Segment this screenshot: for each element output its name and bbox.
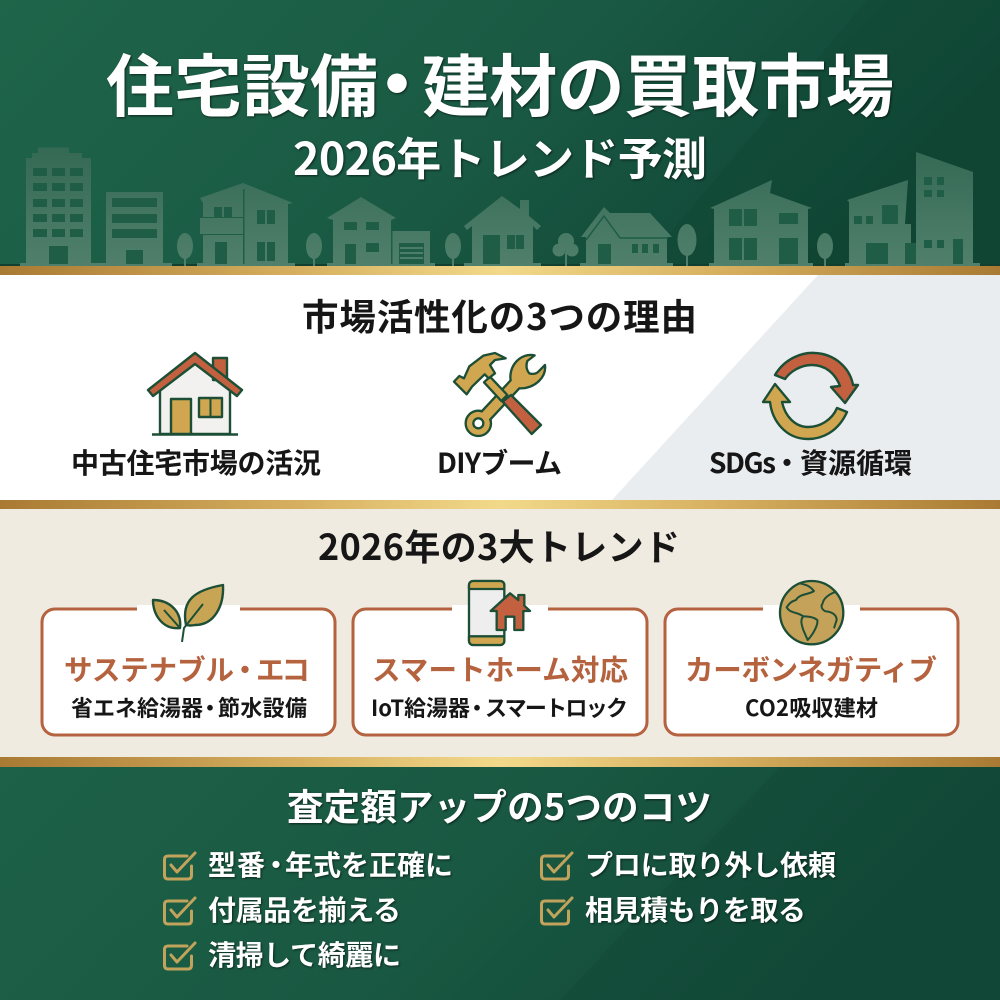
- tip 1: 年式を正確に: [285, 844, 453, 884]
- panel: tips background: [0, 767, 1000, 1000]
- label: used housing market: 中古住宅市場の活況: [71, 442, 321, 482]
- gold divider: [0, 757, 1000, 767]
- title: ・: [359, 24, 435, 134]
- heading: trends: 2026年の3大トレンド: [318, 519, 680, 571]
- card title: サステナブル: [64, 648, 234, 689]
- panel: trends background: [0, 509, 1000, 757]
- label: SDGs and resource circulation: SDGs: [709, 442, 776, 482]
- two storey house: [197, 183, 295, 266]
- card title: [64, 648, 310, 689]
- tip 5: 相見積もりを取る: [585, 889, 806, 929]
- card text: スマートロック: [485, 691, 628, 723]
- icon: leaves: [153, 585, 223, 642]
- label: DIY boom: DIYブーム: [437, 442, 562, 482]
- icon: recycle arrows: [763, 353, 858, 439]
- card text: [71, 691, 307, 723]
- label: SDGs and resource circulation: ・: [773, 442, 801, 482]
- label: SDGs and resource circulation: 資源循環: [800, 442, 912, 482]
- icon: phone with house: [469, 581, 530, 645]
- tip 2: 付属品を揃える: [208, 889, 401, 929]
- title: 住宅設備: [106, 32, 378, 131]
- card text: [371, 691, 628, 723]
- hammer: [454, 353, 541, 434]
- skyline illustration: [0, 147, 1000, 267]
- cottage: [580, 207, 673, 266]
- tip 1: ・: [262, 844, 290, 884]
- gold divider: [0, 500, 1000, 509]
- card text: IoT給湯器: [371, 691, 470, 723]
- townhouse and tower: [845, 152, 980, 266]
- tip 1: [164, 844, 453, 884]
- card: carbon negative: [665, 581, 958, 735]
- card: smart home: [353, 581, 647, 735]
- tip 3: 清掃して綺麗に: [208, 934, 401, 974]
- icon: globe: [780, 581, 843, 644]
- modern house: [709, 180, 813, 266]
- tip 4: プロに取り外し依頼: [585, 844, 836, 884]
- gold divider: [0, 266, 1000, 275]
- office building: [96, 192, 172, 266]
- card text: ・: [199, 691, 221, 723]
- card text: 省エネ給湯器: [71, 691, 203, 723]
- icon: hammer and wrench: [454, 353, 545, 436]
- card text: ・: [466, 691, 488, 723]
- card text: 節水設備: [218, 691, 307, 723]
- card: sustainable: [42, 585, 335, 735]
- card text: CO2吸収建材: [745, 691, 878, 723]
- house with garage: [327, 197, 435, 266]
- tip 1: 型番: [208, 844, 265, 884]
- tree: [445, 233, 461, 266]
- title: 建材の買取市場: [422, 32, 894, 131]
- tall tree: [678, 224, 696, 266]
- tree: [817, 233, 833, 266]
- tree: [306, 233, 322, 266]
- tree: [177, 233, 193, 266]
- card title: スマートホーム対応: [372, 648, 628, 689]
- panel: reasons background: [0, 275, 1000, 500]
- title: [106, 24, 894, 134]
- apartment tower: [20, 147, 101, 266]
- heading: reasons: 市場活性化の3つの理由: [302, 288, 697, 341]
- card title: カーボンネガティブ: [685, 648, 937, 689]
- icon: house: [148, 353, 242, 434]
- gabled house: [464, 196, 541, 266]
- round tree: [552, 233, 578, 266]
- card title: エコ: [256, 648, 310, 689]
- card title: ・: [231, 648, 259, 689]
- heading: tips: 査定額アップの5つのコツ: [287, 778, 712, 831]
- label: SDGs and resource circulation: [709, 442, 912, 482]
- wrench: [466, 355, 545, 436]
- panel: header background: [0, 0, 1000, 266]
- subtitle: 2026年トレンド予測: [293, 123, 707, 188]
